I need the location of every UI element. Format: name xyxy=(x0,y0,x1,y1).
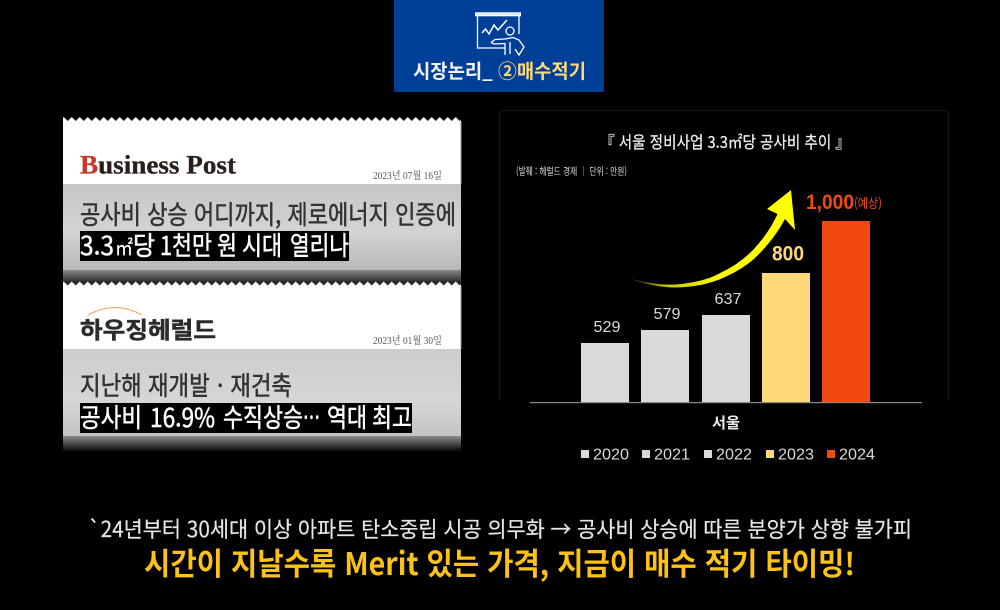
legend: 2024 xyxy=(839,446,875,464)
headline line 2 highlight: … xyxy=(303,398,320,435)
bar chart: 1,000 xyxy=(806,191,854,214)
legend: 2022 xyxy=(716,446,752,464)
bar chart: (예상) xyxy=(854,193,882,212)
bar chart: 529 xyxy=(594,319,621,336)
date: 2023년 07월 16일 xyxy=(373,169,442,182)
bar chart: 579 xyxy=(654,306,681,323)
arrow: rising trend xyxy=(628,190,795,288)
headline line 2 highlight: 3.3 xyxy=(80,226,114,263)
logo: Housing Herald: 하우징헤럴드 xyxy=(80,311,216,345)
chart title: 『 서울 정비사업 3.3㎡당 공사비 추이 』 xyxy=(600,129,850,153)
bar chart: 637 xyxy=(714,291,742,308)
headline line 2 highlight: 1천만 xyxy=(160,226,212,263)
headline line 2 highlight: 당 xyxy=(133,226,155,263)
icon: presenter at chart board xyxy=(476,13,524,55)
headline line 2 highlight: 시대 xyxy=(242,226,282,263)
header title: 시장논리_ ②매수적기 xyxy=(413,55,586,84)
headline line 2 highlight xyxy=(80,226,349,263)
logo: Business Post: Business Post xyxy=(80,150,236,180)
bar chart: 800 xyxy=(772,242,804,266)
headline line 2 highlight: 16.9% xyxy=(150,398,215,435)
legend xyxy=(581,446,875,464)
headline line 2 highlight: ㎡ xyxy=(115,232,133,261)
legend: 2020 xyxy=(593,446,629,464)
headline line 2 highlight: 수직상승 xyxy=(223,398,303,435)
headline line 1: 공사비 상승 어디까지, 제로에너지 인증에 xyxy=(80,195,456,232)
headline line 2 highlight: 열리나 xyxy=(290,226,349,263)
headline line 2 highlight: 원 xyxy=(217,226,237,263)
bar chart: 서울 xyxy=(712,412,740,433)
date: 2023년 01월 30일 xyxy=(373,334,442,347)
source note: (발췌 : 헤럴드 경제 ｜ 단위 : 만원) xyxy=(516,163,627,178)
panel: chart xyxy=(500,110,948,464)
headline line 2 highlight: 역대 xyxy=(327,398,367,435)
summary text: `24년부터 30세대 이상 아파트 탄소중립 시공 의무화 → 공사비 상승에 따른 분양가 상향 불가피 xyxy=(88,513,912,544)
legend: 2021 xyxy=(654,446,690,464)
headline line 1: 지난해 재개발ㆍ재건축 xyxy=(80,366,292,403)
legend: 2023 xyxy=(778,446,814,464)
panel: Business Post article xyxy=(63,117,462,282)
panel: Housing Herald article xyxy=(63,282,462,452)
headline line 2 highlight: 공사비 xyxy=(80,398,142,435)
headline line 2 highlight: 최고 xyxy=(372,398,412,435)
header badge xyxy=(394,0,604,92)
headline line 2 highlight xyxy=(80,398,412,435)
conclusion headline: 시간이 지날수록 Merit 있는 가격, 지금이 매수 적기 타이밍! xyxy=(144,539,855,584)
bar chart xyxy=(530,191,922,433)
